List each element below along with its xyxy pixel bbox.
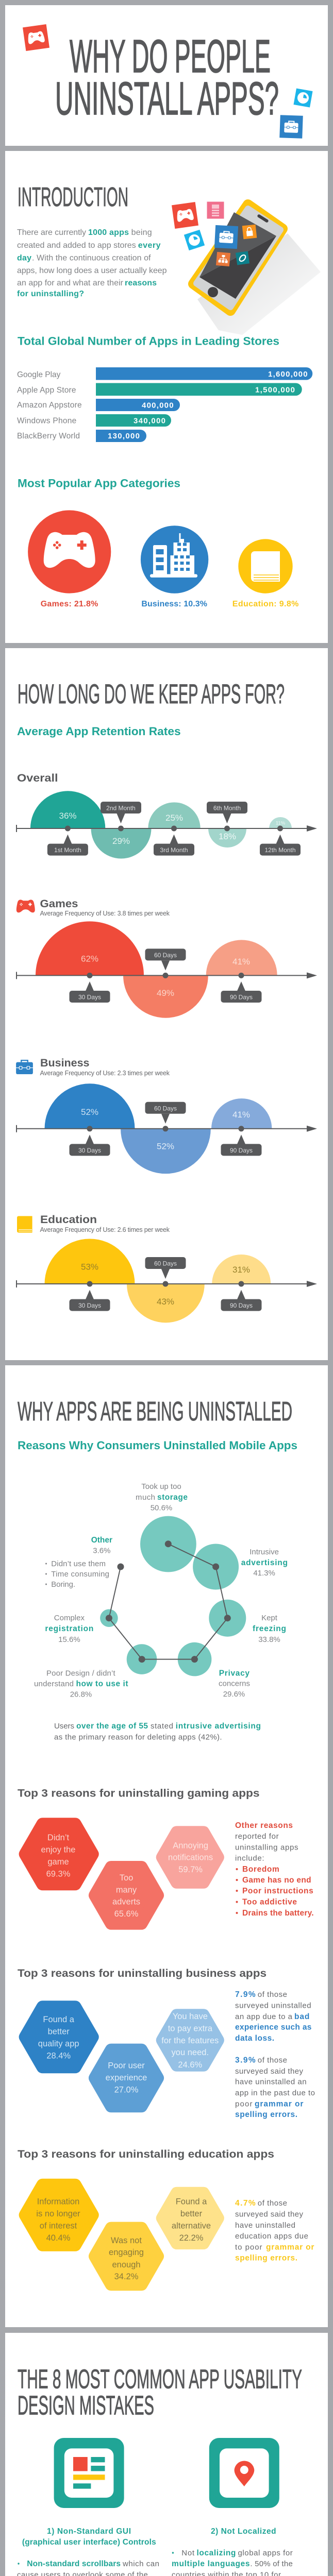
bar chart: apps per store: BlackBerry World xyxy=(17,432,80,440)
chart heading: overall: Overall xyxy=(17,772,58,784)
hexagon: didn't enjoy the game: 69.3% xyxy=(46,1870,71,1879)
timeline chart: business: 52% xyxy=(157,1142,174,1151)
text: business notes: data loss. xyxy=(235,2034,274,2043)
label: poor design: 26.8% xyxy=(70,1690,92,1699)
callout: 90 days: 90 Days xyxy=(230,993,253,1001)
text: business notes: of those xyxy=(258,1990,287,1999)
hexagon: too many adverts: many xyxy=(116,1886,137,1895)
app icon: briefcase xyxy=(214,225,238,249)
category: education xyxy=(232,539,298,608)
bar chart: apps per store: Apple App Store xyxy=(17,386,76,395)
heading: gaming reasons: Top 3 reasons for uninstalling gaming apps xyxy=(18,1788,260,1800)
callout: 2nd month: 2nd Month xyxy=(106,805,136,812)
hexagon: poor user experience xyxy=(95,2050,158,2106)
hexagon: information no longer of interest: of interest xyxy=(40,2222,77,2231)
hexagon: poor user experience: 27.0% xyxy=(114,2086,139,2095)
callout: 6th month: 6th Month xyxy=(213,805,241,812)
text: business notes: poor xyxy=(235,2099,253,2108)
note: users over 55: stated xyxy=(151,1722,173,1731)
text: education note: grammar or xyxy=(266,2243,314,2252)
hexagon: found a better quality app: better xyxy=(48,2027,70,2036)
callout: 60 days: 60 Days xyxy=(154,952,177,959)
callout: 30 days xyxy=(69,1290,110,1311)
hexagon: too many adverts: Too xyxy=(120,1873,133,1883)
hexagon: information no longer of interest: Information xyxy=(37,2197,79,2206)
timeline chart: overall xyxy=(16,791,317,859)
text: other gaming reasons: Too addictive xyxy=(242,1898,297,1907)
chart heading: education: Education xyxy=(40,1214,97,1226)
app icon: hierarchy xyxy=(216,252,230,266)
heading: popular categories: Most Popular App Categories xyxy=(18,477,180,489)
label: storage: much xyxy=(136,1493,155,1502)
callout: 30 days xyxy=(69,981,110,1003)
timeline chart: business: 41% xyxy=(232,1110,250,1120)
bar chart: apps per store: 340,000 xyxy=(134,416,165,426)
icon: location pin xyxy=(209,2438,279,2508)
timeline chart: education: 53% xyxy=(81,1262,98,1272)
callout: 6th month xyxy=(207,802,247,823)
text: business notes: of those xyxy=(258,2056,287,2064)
heading: 8 most common mistakes: DESIGN MISTAKES xyxy=(18,2391,154,2421)
bar chart: apps per store: Amazon Appstore xyxy=(17,401,82,410)
label: other xyxy=(45,1536,112,1589)
label: freezing: 33.8% xyxy=(258,1635,280,1644)
callout: 3rd month xyxy=(154,835,194,856)
hexagon: too many adverts: adverts xyxy=(112,1897,140,1907)
hexagon: annoying notifications: notifications xyxy=(168,1853,213,1862)
text: business notes: grammar or xyxy=(255,2099,303,2108)
text: other gaming reasons: Poor instructions xyxy=(242,1887,313,1895)
label: advertising: advertising xyxy=(241,1558,288,1567)
callout: 90 days: 90 Days xyxy=(230,1302,253,1309)
hexagon: better alternative: 22.2% xyxy=(179,2233,204,2243)
mistake 2: not localized: Not xyxy=(181,2549,195,2557)
hexagon: information no longer of interest: is no longer xyxy=(36,2209,80,2218)
intro paragraph: There are currently xyxy=(17,228,86,237)
label: other: Boring. xyxy=(51,1580,75,1589)
hexagon: pay extra: for the features xyxy=(161,2036,219,2045)
callout: 60 days xyxy=(145,1102,186,1124)
hexagon: didn't enjoy the game: game xyxy=(47,1857,69,1867)
hexagon: too many adverts: 65.6% xyxy=(114,1909,139,1919)
text: business notes: spelling errors. xyxy=(235,2110,297,2119)
label: poor design xyxy=(34,1669,128,1699)
text: education note: 4.7% xyxy=(235,2199,256,2208)
label: registration xyxy=(45,1614,93,1644)
text: other gaming reasons: Drains the battery. xyxy=(242,1909,314,1918)
category: games: Games: 21.8% xyxy=(41,600,98,608)
hexagon: didn't enjoy the game: Didn’t xyxy=(47,1833,70,1842)
category: business xyxy=(141,526,208,608)
intro paragraph: apps, how long does a user actually keep xyxy=(17,266,167,275)
callout: 30 days: 30 Days xyxy=(78,1302,101,1309)
icon: briefcase xyxy=(279,115,303,139)
category: business: Business: 10.3% xyxy=(141,600,207,608)
label: advertising: 41.3% xyxy=(253,1569,275,1578)
label: privacy: Privacy xyxy=(219,1669,249,1678)
label: poor design: understand xyxy=(34,1680,74,1688)
chart heading: education xyxy=(17,1214,170,1233)
timeline chart: business: 52% xyxy=(81,1107,98,1117)
hexagon: pay extra: you need. xyxy=(172,2048,209,2057)
hexagon: pay extra: to pay extra xyxy=(168,2024,213,2033)
text: education note: of those xyxy=(258,2199,287,2208)
chart heading: games xyxy=(16,898,170,917)
hexagon: found a better quality app: quality app xyxy=(38,2039,79,2048)
intro paragraph xyxy=(17,228,167,298)
label: privacy xyxy=(219,1669,250,1699)
icon: game xyxy=(23,24,49,51)
callout: 1st month xyxy=(47,835,88,856)
heading: business reasons: Top 3 reasons for uninstalling business apps xyxy=(18,1968,267,1979)
mistake 2: not localized: multiple languages xyxy=(172,2560,249,2568)
timeline chart: education: 43% xyxy=(157,1297,174,1307)
category: education: Education: 9.8% xyxy=(232,600,298,608)
heading: education reasons: Top 3 reasons for uninstalling education apps xyxy=(18,2148,274,2160)
text: education note: have uninstalled xyxy=(235,2221,295,2230)
heading: introduction: INTRODUCTION xyxy=(18,182,128,212)
intro paragraph: reasons xyxy=(125,279,157,287)
mistake 1: non-standard GUI: which can xyxy=(122,2560,159,2568)
hexagon: not engaging enough: Was not xyxy=(111,2236,142,2245)
text: business notes: app in the past due to xyxy=(235,2089,315,2097)
app icon: chart xyxy=(184,230,205,250)
text: other gaming reasons: reported for xyxy=(235,1832,279,1841)
icon: non-standard GUI xyxy=(54,2438,124,2508)
label: storage: Took up too xyxy=(141,1482,181,1491)
label: other: Time consuming xyxy=(51,1570,109,1579)
hexagon: found a better quality app xyxy=(25,2007,93,2067)
hexagon: information no longer of interest: 40.4% xyxy=(46,2233,71,2243)
hexagon: poor user experience: experience xyxy=(106,2073,147,2082)
hexagon: didn't enjoy the game: enjoy the xyxy=(41,1845,75,1855)
hexagon: not engaging enough: enough xyxy=(112,2260,141,2269)
timeline chart: overall: 36% xyxy=(59,811,77,821)
hexagon: annoying notifications xyxy=(162,1832,218,1883)
hexagon: better alternative: Found a xyxy=(176,2197,207,2206)
chart heading: business: Business xyxy=(40,1057,90,1069)
hexagon: pay extra xyxy=(161,2012,219,2070)
text: business notes: have uninstalled an xyxy=(235,2078,307,2087)
chart: reasons wheel xyxy=(34,1482,288,1699)
label: poor design: how to use it xyxy=(76,1680,128,1688)
heading: 8 most common mistakes xyxy=(18,2364,302,2421)
bar chart: apps per store xyxy=(17,367,312,442)
note: users over 55: intrusive advertising xyxy=(176,1722,261,1731)
app icon: pencil xyxy=(236,251,249,265)
text: business notes: 3.9% xyxy=(235,2056,256,2064)
intro paragraph: 1000 apps xyxy=(88,228,129,237)
mistake 2: not localized: localizing xyxy=(197,2549,236,2557)
intro paragraph: every xyxy=(138,241,161,250)
label: privacy: 29.6% xyxy=(223,1690,245,1699)
mistake 2: not localized: . 50% of the xyxy=(250,2560,293,2568)
heading: retention rates: Average App Retention Rates xyxy=(17,725,181,738)
text: other gaming reasons: Other reasons xyxy=(235,1821,293,1830)
label: freezing: Kept xyxy=(261,1614,278,1622)
label: freezing: freezing xyxy=(253,1624,286,1633)
text: education note: spelling errors. xyxy=(235,2253,297,2263)
intro paragraph: being xyxy=(131,228,152,237)
hexagon: annoying notifications: 59.7% xyxy=(178,1865,203,1874)
timeline chart: games: 49% xyxy=(157,988,174,998)
text: education note: education apps due xyxy=(235,2232,308,2241)
hexagon: better alternative xyxy=(162,2193,218,2243)
bar chart: apps per store: 130,000 xyxy=(108,432,140,440)
label: other: Didn’t use them xyxy=(51,1560,106,1568)
mistake 2: not localized xyxy=(171,2527,311,2576)
label: storage: storage xyxy=(157,1493,188,1502)
callout: 1st month: 1st Month xyxy=(54,846,81,854)
text: education note: surveyed said they xyxy=(235,2210,303,2218)
callout: 12th month xyxy=(260,835,301,856)
text: business notes: surveyed uninstalled xyxy=(235,2001,311,2010)
text: other gaming reasons: Game has no end xyxy=(242,1876,311,1885)
app icon: lock xyxy=(242,225,257,239)
hexagon: found a better quality app: 28.4% xyxy=(46,2052,71,2061)
bar chart: apps per store: Windows Phone xyxy=(17,416,76,426)
panel: introduction xyxy=(5,151,328,643)
label: storage xyxy=(136,1482,188,1513)
note: users over 55: Users xyxy=(54,1722,74,1731)
label: advertising: Intrusive xyxy=(249,1548,279,1556)
hexagon: not engaging enough: 34.2% xyxy=(114,2272,139,2281)
hexagon: not engaging enough: engaging xyxy=(109,2248,144,2257)
text: other gaming reasons: include: xyxy=(235,1854,264,1863)
callout: 3rd month: 3rd Month xyxy=(160,846,188,854)
bar chart: apps per store: 1,600,000 xyxy=(268,370,308,379)
icon: chart xyxy=(293,88,313,108)
category: games xyxy=(28,510,111,608)
text: other gaming reasons: uninstalling apps xyxy=(235,1843,298,1852)
bar chart: apps per store: 1,500,000 xyxy=(255,385,295,395)
text: business notes: surveyed said they xyxy=(235,2067,303,2076)
intro paragraph: . With the continuous creation of xyxy=(32,253,151,263)
callout: 60 days xyxy=(145,948,186,971)
panel: why apps are uninstalled xyxy=(5,1365,328,2327)
timeline chart: overall: 25% xyxy=(165,813,183,823)
label: other: Other xyxy=(91,1536,112,1545)
timeline chart: games xyxy=(16,921,317,1018)
hexagon: annoying notifications: Annoying xyxy=(173,1841,208,1851)
note: users over 55 xyxy=(54,1722,261,1741)
callout: 12th month: 12th Month xyxy=(264,846,296,854)
label: registration: Complex xyxy=(54,1614,85,1622)
callout: 30 days: 30 Days xyxy=(78,1147,101,1154)
callout: 2nd month xyxy=(101,802,141,823)
label: poor design: Poor Design / didn’t xyxy=(46,1669,116,1678)
text: business notes: 7.9% xyxy=(235,1990,256,1999)
hexagon: better alternative: alternative xyxy=(172,2222,211,2231)
callout: 60 days xyxy=(145,1257,186,1279)
text: education note: to poor xyxy=(235,2243,262,2252)
chart heading: business: Average Frequency of Use: 2.3 times per week xyxy=(40,1070,170,1077)
chart heading: business xyxy=(16,1057,170,1077)
app icon: game xyxy=(172,202,198,229)
hexagon: didn't enjoy the game xyxy=(25,1824,93,1884)
hexagon: found a better quality app: Found a xyxy=(43,2015,75,2024)
timeline chart: games: 62% xyxy=(81,954,98,963)
text: other gaming reasons: Boredom xyxy=(242,1865,279,1874)
label: storage: 50.6% xyxy=(151,1504,172,1513)
hexagon: information no longer of interest xyxy=(25,2185,93,2245)
intro paragraph: day xyxy=(17,253,31,263)
callout: 90 days xyxy=(221,981,262,1003)
callout: 30 days xyxy=(69,1134,110,1156)
hexagon: not engaging enough xyxy=(95,2228,158,2284)
mistake 1: non-standard GUI: Non-standard scrollbars xyxy=(27,2560,121,2568)
app icon: storage xyxy=(207,202,224,218)
label: freezing xyxy=(253,1614,286,1644)
text: other gaming reasons xyxy=(235,1821,314,1918)
timeline chart: business xyxy=(16,1083,317,1174)
text: business notes: bad xyxy=(294,2012,309,2021)
mistake 2: not localized: 2) Not Localized xyxy=(211,2527,276,2536)
intro paragraph: an app for and what are their xyxy=(17,279,124,287)
text: business notes xyxy=(235,1990,315,2119)
timeline chart: overall: 29% xyxy=(112,836,130,846)
label: privacy: concerns xyxy=(219,1680,250,1688)
title xyxy=(55,31,279,125)
intro paragraph: created and added to app stores xyxy=(17,241,136,250)
label: other: 3.6% xyxy=(93,1547,111,1555)
text: business notes: experience such as xyxy=(235,2023,311,2032)
panel: usability mistakes xyxy=(5,2333,328,2576)
panel: how long do we keep apps xyxy=(5,648,328,1360)
hexagon: better alternative: better xyxy=(180,2209,203,2218)
chart heading: games: Average Frequency of Use: 3.8 times per week xyxy=(40,910,170,917)
intro paragraph: for uninstalling? xyxy=(17,290,84,298)
timeline chart: education: 31% xyxy=(232,1265,250,1275)
mistake 1: non-standard GUI: (graphical user interface) Controls xyxy=(22,2538,156,2547)
callout: 60 days: 60 Days xyxy=(154,1260,177,1267)
callout: 90 days xyxy=(221,1290,262,1311)
mistake 2: not localized: global apps for xyxy=(238,2549,293,2557)
timeline chart: games: 41% xyxy=(232,957,250,967)
chart heading: games: Games xyxy=(40,898,78,910)
timeline chart: overall: 18% xyxy=(219,832,236,841)
mistake 1: non-standard GUI: 1) Non-Standard GUI xyxy=(47,2527,131,2536)
illustration: phone with app icons xyxy=(172,202,321,335)
label: registration: registration xyxy=(45,1624,93,1633)
text: education note xyxy=(235,2199,314,2263)
bar chart: apps per store: 400,000 xyxy=(142,401,174,410)
heading: reasons: Reasons Why Consumers Uninstalled Mobile Apps xyxy=(18,1439,297,1452)
hexagon: pay extra: You have xyxy=(173,2012,208,2021)
hexagon: pay extra: 24.6% xyxy=(178,2060,203,2070)
callout: 90 days xyxy=(221,1134,262,1156)
panel: title xyxy=(5,5,328,146)
hexagon: too many adverts xyxy=(95,1867,158,1924)
chart heading: education: Average Frequency of Use: 2.6 times per week xyxy=(40,1226,170,1233)
bar chart: apps per store: Google Play xyxy=(17,370,61,379)
text: business notes: an app due to a xyxy=(235,2012,293,2021)
heading: total number of apps: Total Global Number of Apps in Leading Stores xyxy=(18,335,279,347)
callout: 30 days: 30 Days xyxy=(78,993,101,1001)
hexagon: poor user experience: Poor user xyxy=(108,2061,145,2070)
label: advertising xyxy=(241,1548,288,1578)
mistake 1: non-standard GUI xyxy=(17,2527,159,2576)
timeline chart: education xyxy=(16,1239,317,1323)
label: registration: 15.6% xyxy=(58,1635,80,1644)
note: users over 55: as the primary reason for deleting apps (42%). xyxy=(54,1733,222,1741)
note: users over 55: over the age of 55 xyxy=(76,1722,148,1731)
callout: 60 days: 60 Days xyxy=(154,1105,177,1112)
callout: 90 days: 90 Days xyxy=(230,1147,253,1154)
timeline chart: overall: 11% xyxy=(276,821,286,826)
